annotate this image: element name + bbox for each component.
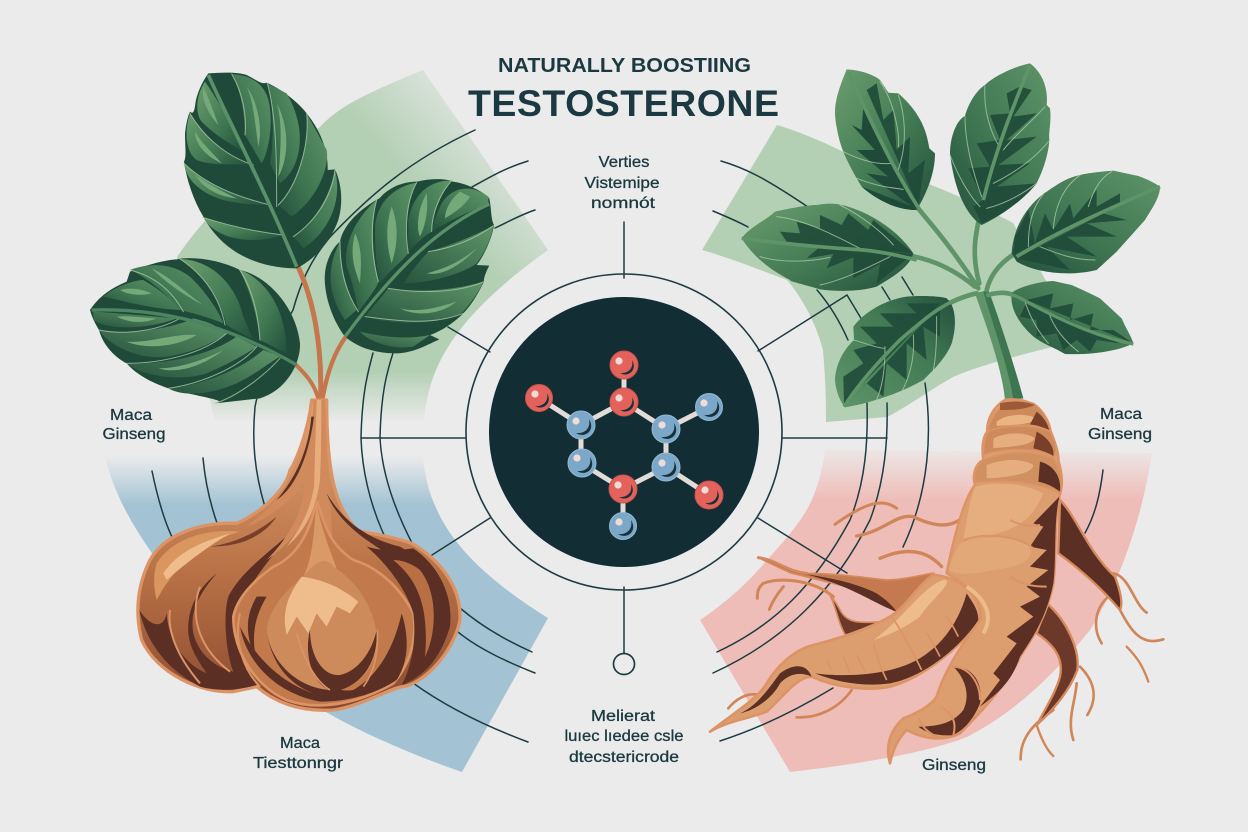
side root arms (758, 558, 933, 612)
leaf: lower right (992, 281, 1133, 354)
left lobe shading (139, 533, 290, 690)
molecule atoms (526, 351, 723, 540)
text block: bottom centre: Melierat (591, 708, 656, 725)
green band: upper right (702, 125, 1080, 422)
centre lobe (233, 500, 414, 705)
leaf: upper centre (950, 63, 1050, 225)
text block: bottom centre: dtecstericrode (569, 749, 679, 766)
leaf: top (184, 73, 341, 268)
text block: bottom centre (564, 708, 684, 766)
title line 1: NATURALLY BOOSTIING (498, 54, 751, 77)
right lobe shading (367, 547, 450, 685)
label: left: Maca (110, 407, 152, 424)
lower centre leg shading (918, 667, 981, 735)
pink band: lower right (700, 450, 1152, 772)
title line 2: TESTOSTERONE (468, 82, 779, 124)
central molecule medallion (466, 274, 782, 590)
label: right (1088, 406, 1152, 443)
text block: top centre: Verties (598, 154, 650, 171)
text block: top centre: Vistemipe (584, 175, 660, 192)
maca bulb root (138, 400, 460, 710)
leaf: mid left (742, 204, 917, 291)
leaf: upper left (835, 69, 935, 210)
title (468, 54, 779, 124)
molecule bonds (539, 365, 709, 526)
text block: top centre (584, 154, 660, 212)
dark disc (489, 297, 759, 567)
body highlights and shadow (963, 484, 1043, 540)
leaf: lower left (835, 295, 972, 407)
cap bands (988, 401, 1050, 432)
label: bottom left (253, 735, 343, 772)
ginseng root (710, 399, 1163, 763)
main body (888, 399, 1062, 763)
neck streaks (247, 400, 333, 567)
small node circle (614, 654, 634, 674)
label: bottom right: Ginseng (922, 757, 986, 774)
label: bottom left: Maca (280, 735, 320, 752)
outer ring (466, 274, 782, 590)
green band: upper left (177, 70, 548, 422)
leaf: right (325, 179, 494, 353)
leaf: mid right (1012, 171, 1160, 273)
blue band: lower left (105, 456, 548, 772)
lower left arm (710, 575, 980, 732)
leaf: left (90, 258, 300, 403)
text block: top centre: nomnót (591, 195, 656, 212)
connector lines and arcs (152, 130, 1103, 742)
right plant leaves and stem (742, 63, 1160, 407)
text block: bottom centre: luıec lıedee csle (564, 728, 684, 745)
label: bottom left: Tiesttonngr (253, 755, 343, 772)
label: left (102, 407, 166, 443)
left plant leaves and stem (90, 73, 494, 412)
label: right: Maca (1100, 406, 1142, 423)
fine rootlets (728, 503, 1163, 759)
stem (295, 267, 346, 412)
stem (863, 200, 1050, 400)
label: left: Ginseng (102, 426, 166, 443)
label: right: Ginseng (1088, 426, 1152, 443)
